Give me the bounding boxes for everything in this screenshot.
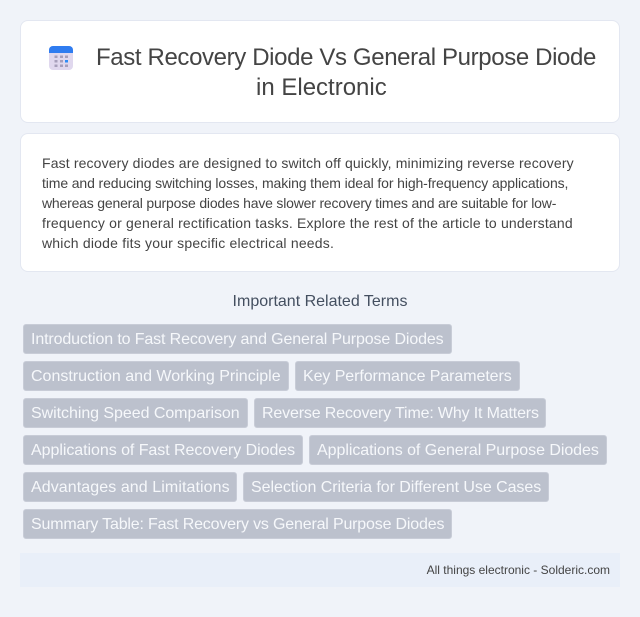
tag: Switching Speed Comparison [31, 405, 240, 422]
tag [295, 361, 520, 391]
tag: Applications of Fast Recovery Diodes [31, 442, 295, 459]
text block: intro: time and reducing switching losses, making them ideal for high-frequency applications, [42, 175, 568, 191]
tag: Applications of General Purpose Diodes [317, 442, 599, 459]
tag [23, 361, 289, 391]
text block: intro [42, 155, 574, 251]
tag: Selection Criteria for Different Use Cases [251, 479, 541, 496]
text block: intro: whereas general purpose diodes have slower recovery times and are suitable for low- [42, 195, 556, 211]
icon: calendar [49, 46, 73, 70]
footer text: All things electronic - Solderic.com [427, 563, 610, 577]
tag: Construction and Working Principle [31, 368, 281, 385]
tag: Key Performance Parameters [303, 368, 512, 385]
tag [23, 509, 452, 539]
tag [254, 398, 546, 428]
tag [23, 435, 303, 465]
tag [23, 324, 452, 354]
panel: tags [23, 324, 607, 539]
tag: Reverse Recovery Time: Why It Matters [262, 405, 539, 422]
tag: Introduction to Fast Recovery and General Purpose Diodes [31, 331, 444, 348]
tag [23, 472, 237, 502]
text block: intro: which diode fits your specific electrical needs. [42, 235, 334, 251]
title [96, 44, 596, 101]
panel: title card [20, 20, 620, 123]
tag [309, 435, 607, 465]
text block: intro: Fast recovery diodes are designed to switch off quickly, minimizing reverse recovery [42, 155, 574, 171]
tag [243, 472, 549, 502]
title: in Electronic [256, 74, 387, 101]
title: Fast Recovery Diode Vs General Purpose Diode [96, 44, 596, 71]
heading: related terms: Important Related Terms [233, 293, 407, 310]
text block: intro: frequency or general rectification tasks. Explore the rest of the article to understand [42, 215, 573, 231]
tag: Summary Table: Fast Recovery vs General Purpose Diodes [31, 516, 444, 533]
tag [23, 398, 248, 428]
footer [20, 553, 620, 587]
tag: Advantages and Limitations [31, 479, 230, 496]
panel: intro text [20, 133, 620, 272]
